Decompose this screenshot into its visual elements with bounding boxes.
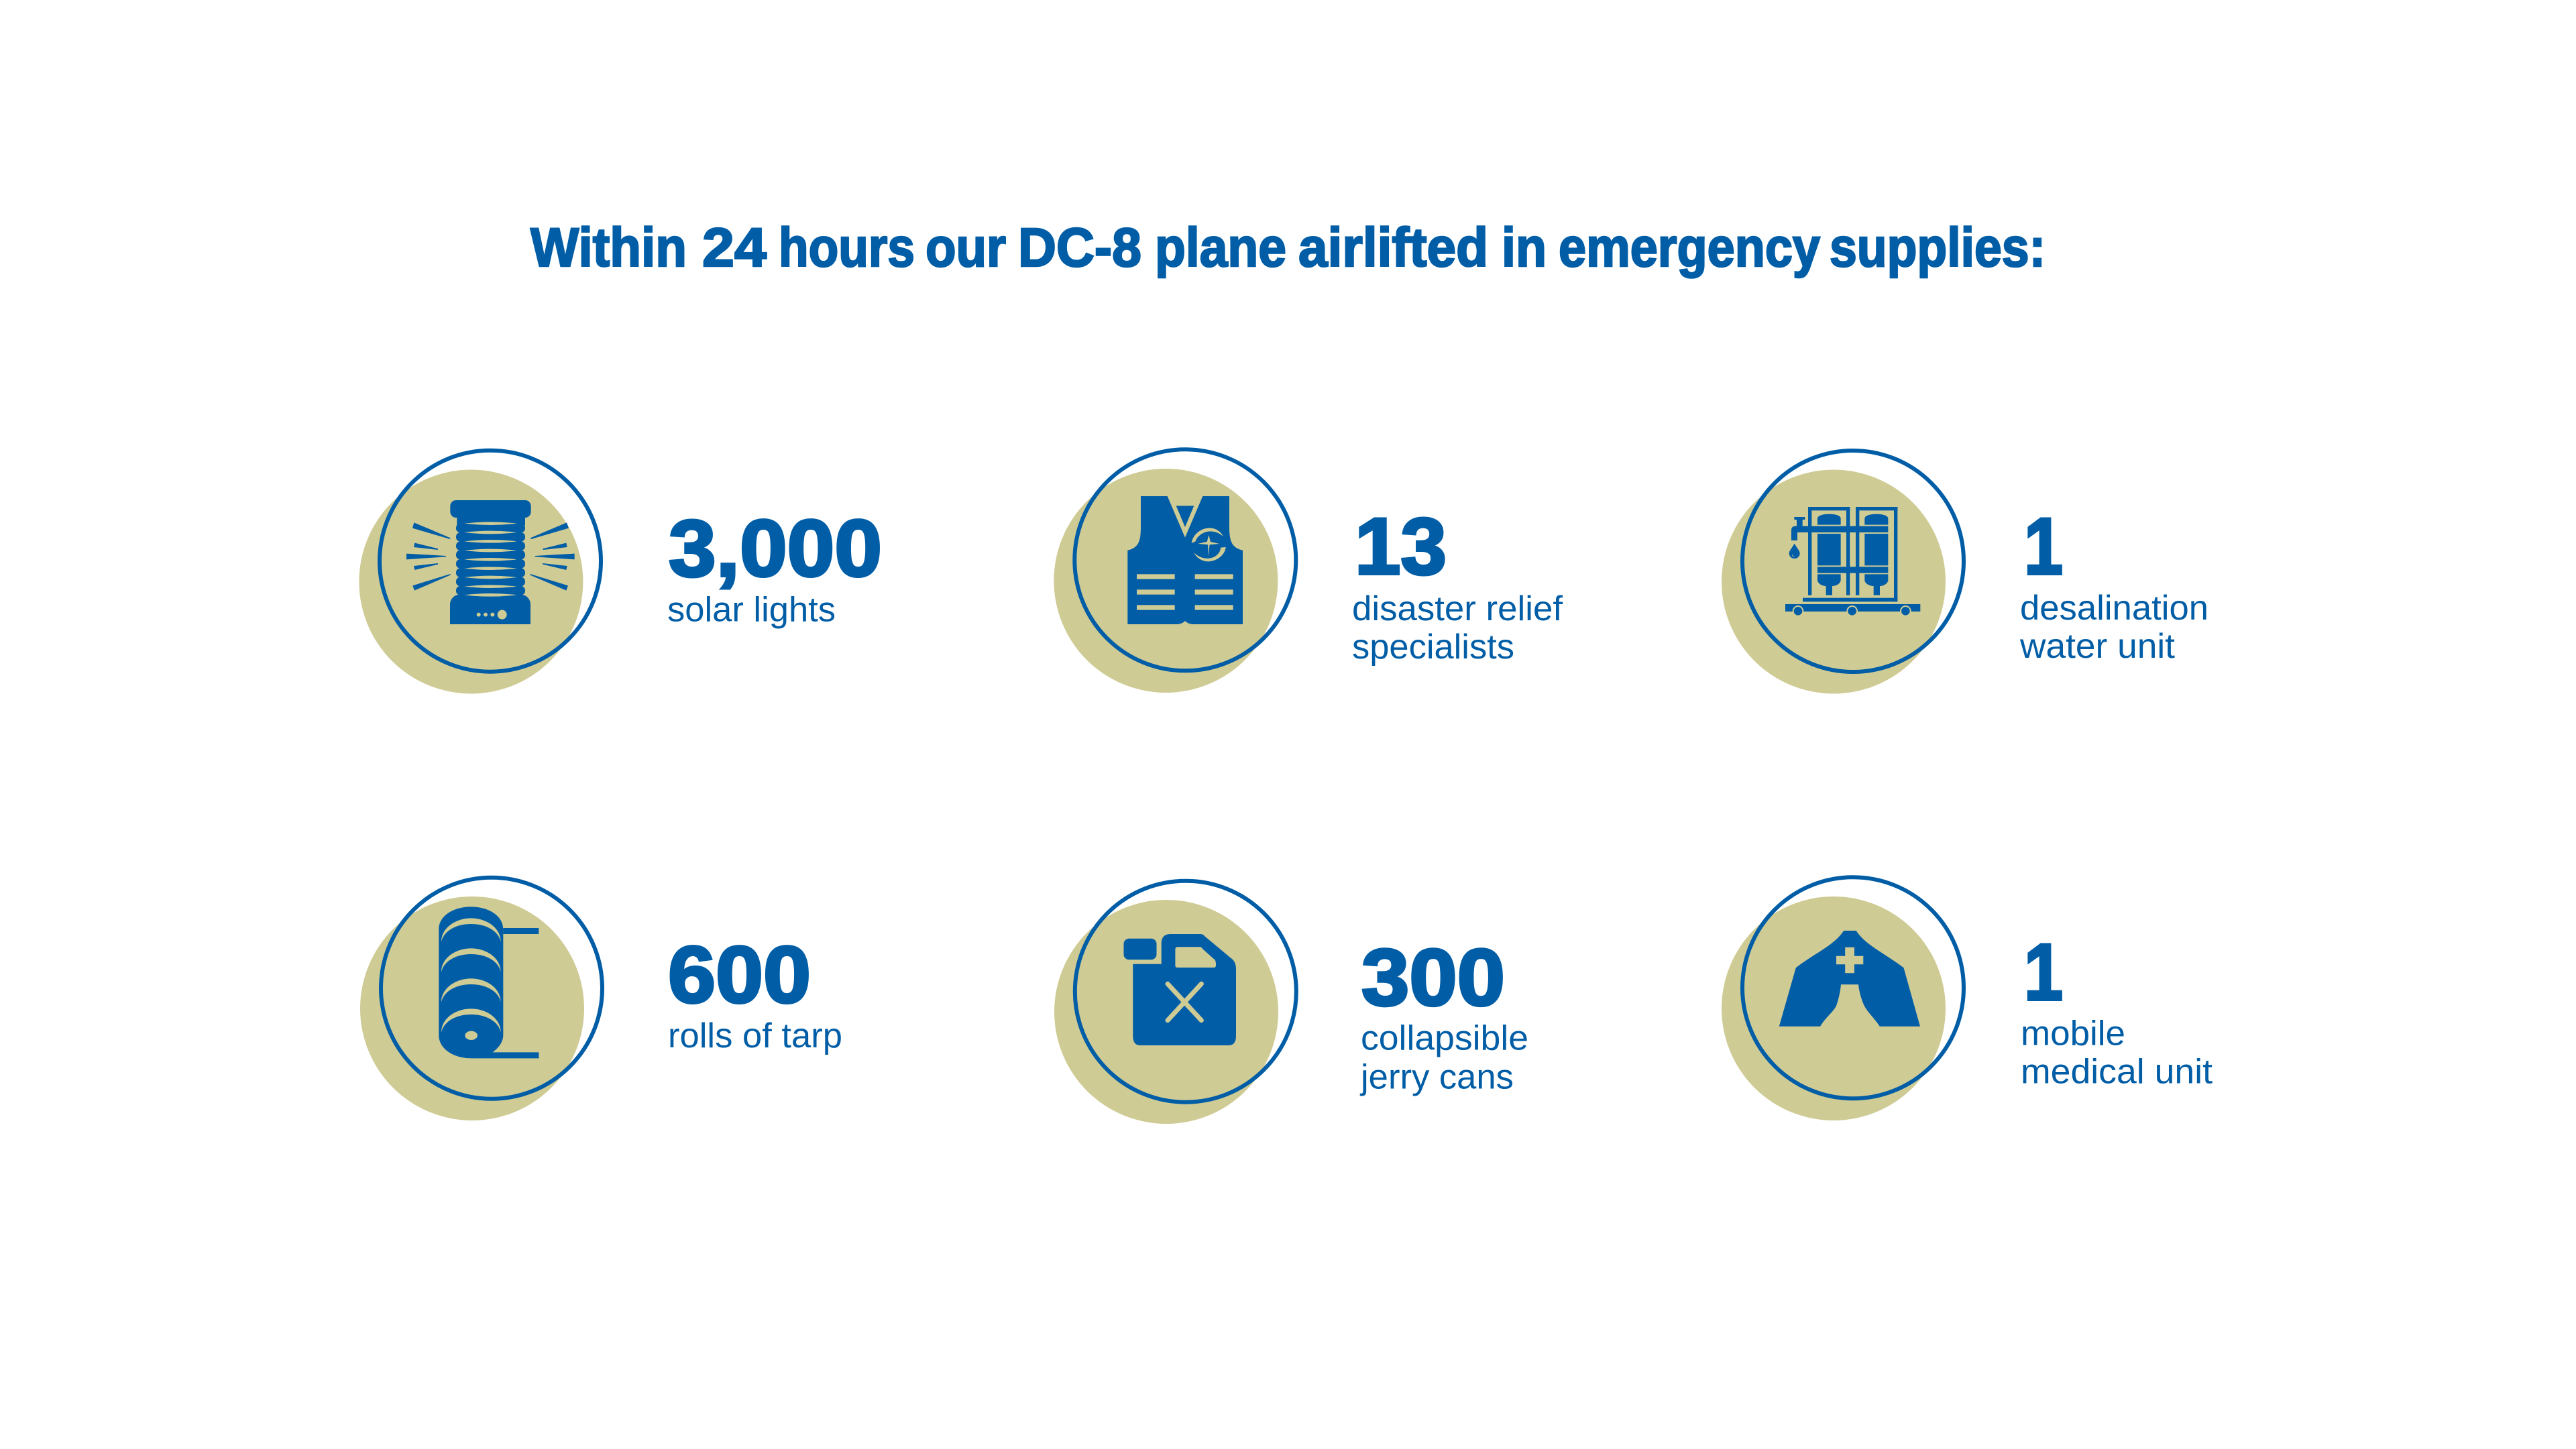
blue ring: specialists — [1074, 449, 1296, 671]
title: in — [1502, 217, 1547, 278]
icon: desalination unit — [1785, 507, 1920, 617]
tan circle: medical unit — [1722, 896, 1946, 1120]
tan circle: jerry cans — [1054, 900, 1278, 1124]
icon: tarp roll — [439, 907, 539, 1058]
title: plane — [1155, 217, 1286, 278]
number: 600: 600 — [668, 930, 811, 1020]
number: 3,000: 3,000 — [669, 504, 882, 593]
number: 1 (desalination): 1 — [2024, 502, 2063, 591]
label: rolls of tarp: rolls of tarp — [668, 1017, 842, 1055]
label: desalination: desalination — [2020, 589, 2208, 628]
title: DC-8 — [1018, 217, 1141, 278]
icon: jerry can — [1124, 934, 1236, 1045]
panel: collapsible jerry cans — [1054, 881, 1528, 1124]
panel: rolls of tarp — [360, 878, 842, 1120]
panel: disaster relief specialists — [1054, 449, 1563, 693]
tan circle: solar lights — [359, 469, 583, 693]
title: emergency — [1559, 217, 1820, 278]
tan circle: tarp — [360, 896, 584, 1120]
label: mobile: mobile — [2021, 1015, 2125, 1053]
label: specialists: specialists — [1352, 628, 1514, 666]
blue ring: tarp — [381, 878, 602, 1099]
blue ring: jerry cans — [1075, 881, 1296, 1102]
label: collapsible: collapsible — [1361, 1019, 1528, 1058]
blue ring: solar lights — [380, 451, 601, 672]
number: 13: 13 — [1355, 502, 1447, 591]
label: jerry cans: jerry cans — [1359, 1058, 1514, 1097]
panel: desalination water unit — [1722, 451, 2208, 693]
panel: solar lights — [359, 451, 882, 693]
title: Within — [530, 217, 687, 278]
icon: relief vest — [1127, 496, 1243, 624]
title: airlifted — [1298, 217, 1488, 278]
tan circle: specialists — [1054, 469, 1278, 693]
title — [530, 217, 2046, 278]
label: solar lights: solar lights — [667, 591, 836, 630]
label: disaster relief: disaster relief — [1352, 589, 1563, 628]
label: water unit: water unit — [2019, 627, 2176, 666]
title: supplies: — [1830, 217, 2046, 278]
icon: solar light lantern — [406, 500, 575, 624]
number: 1 (medical): 1 — [2024, 927, 2063, 1017]
tan circle: desalination — [1722, 469, 1946, 693]
title: 24 — [702, 217, 767, 278]
blue ring: medical unit — [1742, 877, 1964, 1098]
title: our — [926, 217, 1006, 278]
blue ring: desalination — [1742, 451, 1964, 672]
title: hours — [779, 217, 915, 278]
number: 300: 300 — [1361, 933, 1505, 1023]
icon: medical tent — [1779, 931, 1920, 1027]
label: medical unit: medical unit — [2021, 1053, 2213, 1092]
panel: mobile medical unit — [1722, 877, 2213, 1120]
